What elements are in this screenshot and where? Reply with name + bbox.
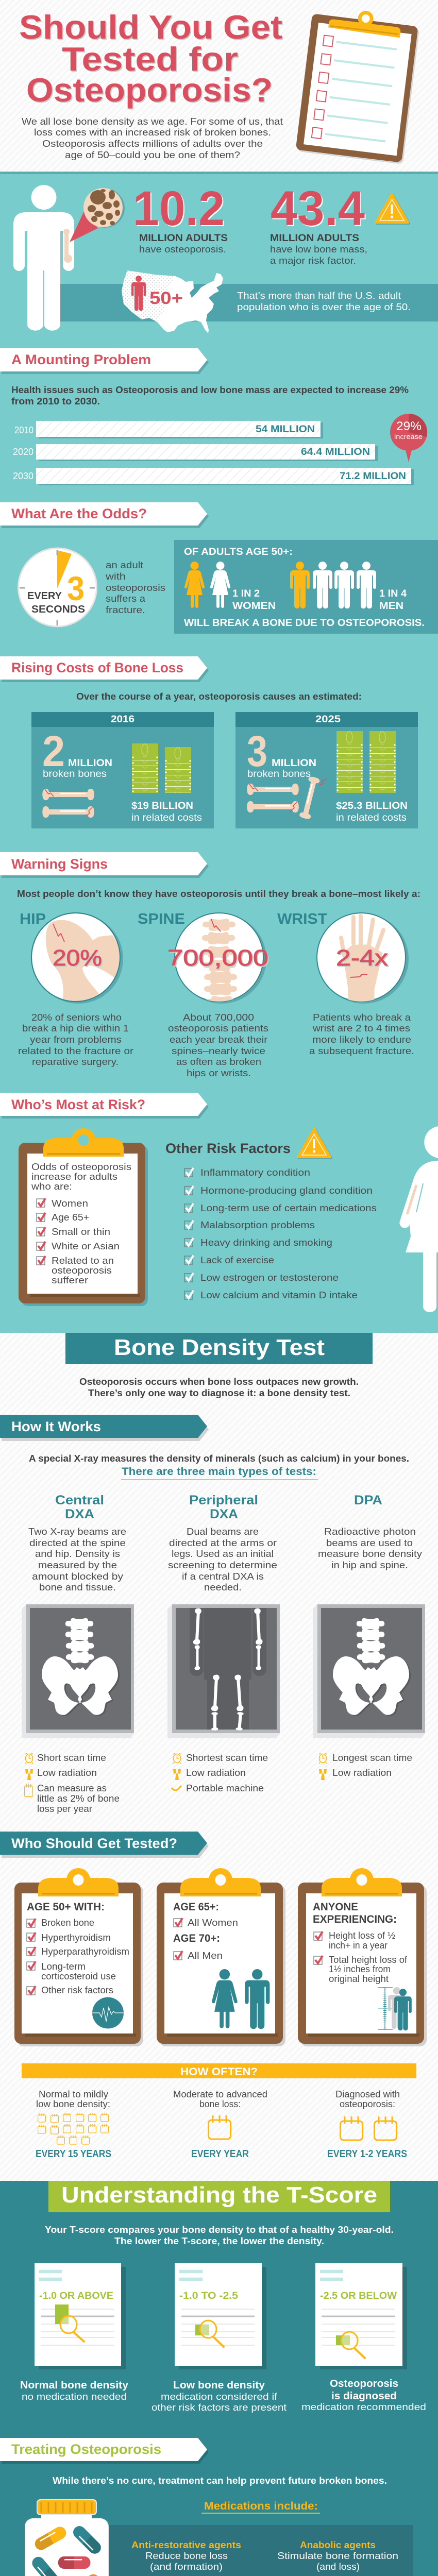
list: Peripheral DXA features: Low radiation [186,1768,246,1778]
stat: 43.4 million: a major risk factor. [270,256,356,266]
text: anabolic agents: Stimulate bone formation [277,2551,398,2561]
bar: 2020 [13,444,378,461]
text: mounting problem: Health issues such as Osteoporosis and low bone mass are expected to increase 29% [11,385,409,395]
bar chart: projected cases [13,421,414,485]
text: wrist stat: a subsequent fracture. [309,1046,414,1056]
stat: 10.2 million: 10.2 [133,181,225,236]
column: every 15 years: low bone density: [36,2099,110,2109]
column: every 1-2 years [327,2089,407,2160]
list: Central DXA features: Short scan time [37,1753,106,1763]
heading: Who's Most at Risk?: Who’s Most at Risk? [11,1097,145,1112]
panel: 2025 costs: 2025 [315,714,341,725]
text: anabolic agents [277,2540,398,2572]
panel: 2016 costs: 2 [42,727,65,775]
panel: 2025 costs: $25.3 BILLION [336,801,408,811]
panel: 2025 costs: in related costs [336,812,407,823]
panel: clipboard age 65+ and 70+: All Women [188,1918,238,1928]
text: normal density: Normal bone density [20,2380,129,2391]
banner: How Often?: HOW OFTEN? [180,2066,258,2078]
icon: x-ray of spine and hip [313,1604,425,1738]
panel: odds by gender: WOMEN [232,601,276,612]
checklist: risk groups: sufferer [52,1275,88,1285]
list: DPA features [319,1753,412,1780]
column: every 1-2 years: Diagnosed with [335,2089,400,2099]
column: Peripheral DXA: directed at the arms or [169,1538,277,1548]
checklist: risk factors: Hormone-producing gland condition [200,1185,373,1196]
text: normal density [20,2380,129,2402]
checklist: risk factors: Inflammatory condition [200,1167,310,1178]
panel: risk clipboard [19,1128,148,1306]
checklist: risk groups [37,1198,120,1285]
text: osteoporosis diagnosed: medication recommended [301,2402,426,2412]
panel: odds by gender: 1 IN 2 [232,588,260,599]
icon: clock every 3 seconds: EVERY [27,590,62,602]
stat: 43.4 million: 43.4 [271,181,365,236]
icon: pill bottle [25,2499,109,2576]
checklist: risk groups: Related to an [52,1256,114,1266]
panel: hip [18,911,133,1067]
panel: T-score -2.5 or below [301,2263,426,2412]
checklist: risk factors: Long-term use of certain medications [200,1203,377,1213]
panel: hip: 20% [53,945,102,971]
column: every year: EVERY YEAR [191,2148,249,2160]
panel: clipboard height loss [298,1868,427,2046]
heading: Understanding the T-Score: Understanding the T-Score [61,2182,377,2208]
panel: odds by gender: WILL BREAK A BONE DUE TO OSTEOPOROSIS. [184,618,425,629]
banner: How Often? [22,2063,416,2078]
heading: Who Should Get Tested?: Who Should Get Tested? [11,1836,177,1851]
text: bone density intro: Osteoporosis occurs when bone loss outpaces new growth. [79,1377,359,1387]
text: fracture statement: an adult [106,560,143,570]
heading: Treating Osteoporosis: Treating Osteoporosis [11,2442,161,2457]
band: over 50 population: That’s more than half the U.S. adult [237,291,401,301]
column: Peripheral DXA: Peripheral [189,1493,258,1507]
panel: risk clipboard: increase for adults [31,1172,117,1182]
panel: risk clipboard: Odds of osteoporosis [31,1162,131,1172]
list: DPA features: Low radiation [332,1768,392,1778]
checklist: risk groups: Women [52,1198,88,1209]
text: hip stat: related to the fracture or [18,1046,133,1056]
panel: clipboard age 50+: corticosteroid use [41,1971,116,1981]
heading: A Mounting Problem [0,348,209,374]
heading: Understanding the T-Score [48,2181,390,2212]
text: wrist stat: Patients who break a [313,1012,411,1023]
text: hip stat: 20% of seniors who [31,1012,122,1023]
icon: clipboard checklist [295,4,421,164]
panel: T-score -1.0 or above: -1.0 OR ABOVE [39,2291,113,2301]
text: anabolic agents: (and loss) [316,2562,360,2572]
text: T-score intro: Your T-score compares your bone density to that of a healthy 30-year-old. [45,2225,394,2235]
list: Peripheral DXA features: Portable machine [186,1783,264,1793]
text: spine stat: each year break their [170,1035,267,1045]
text: treatment intro: While there’s no cure, treatment can help prevent future broken bones. [53,2476,387,2486]
panel: clipboard age 65+ and 70+ [157,1868,285,2046]
panel: odds by gender: MEN [379,601,403,612]
text: anabolic agents: Anabolic agents [300,2540,376,2550]
text: osteoporosis diagnosed: is diagnosed [331,2391,397,2402]
panel: medications: Medications include: [204,2500,318,2512]
text: spine stat: spines–nearly twice [172,1046,265,1056]
text: low density: other risk factors are present [151,2402,287,2413]
column: Peripheral DXA: needed. [204,1582,242,1592]
title: Osteoporosis? [26,71,273,109]
text: bone density intro: There’s only one way to diagnose it: a bone density test. [88,1388,350,1398]
icon: x-ray of spine and hip [22,1604,134,1738]
panel: clipboard age 50+: Broken bone [41,1918,94,1928]
icon: men 1 in 4 [290,562,376,608]
panel: wrist: WRIST [277,911,327,927]
text: hip stat: break a hip die within 1 [22,1023,129,1033]
list: Peripheral DXA features: Shortest scan time [186,1753,268,1763]
heading: Rising Costs of Bone Loss: Rising Costs of Bone Loss [11,660,183,675]
list: Central DXA features: Low radiation [37,1768,97,1778]
stat: 10.2 million: MILLION ADULTS [139,233,228,244]
panel: odds by gender [174,540,438,634]
panel: T-score -1.0 or above [20,2263,129,2402]
icon: money stacks [132,743,191,793]
intro text [22,116,283,160]
column: Peripheral DXA: DXA [210,1507,238,1521]
heading: Bone Density Test [65,1333,373,1364]
heading: Rising Costs of Bone Loss [0,656,209,682]
column: DPA: measure bone density [318,1549,422,1559]
list: Peripheral DXA features [172,1753,268,1793]
title: Tested for [62,40,238,78]
text: low density: medication considered if [161,2392,278,2402]
icon: two calendars [340,2116,397,2140]
bar: 2020: 2020 [13,447,33,457]
icon: calendar [208,2115,231,2139]
bar: 2010: 2010 [14,425,33,435]
intro text: We all lose bone density as we age. For some of us, that [22,116,283,127]
checklist: risk factors: Malabsorption problems [200,1220,315,1230]
panel: 2025 costs: 3 [247,727,267,775]
column: Peripheral DXA: Dual beams are [187,1527,259,1537]
heading: What Are the Odds?: What Are the Odds? [11,506,147,521]
text: costs intro: Over the course of a year, osteoporosis causes an estimated: [76,691,362,702]
checklist: risk factors: Lack of exercise [200,1255,274,1265]
checklist: risk groups: osteoporosis [52,1265,112,1276]
text: hip stat: reparative surgery. [32,1057,119,1067]
panel: spine: SPINE [138,911,185,927]
panel: 2025 costs: broken bones [247,769,311,779]
list: Central DXA features: little as 2% of bone [37,1793,120,1804]
panel: 2016 costs: $19 BILLION [131,801,193,811]
intro text: age of 50–could you be one of them? [65,150,240,160]
icon: women 1 in 2 [184,562,230,608]
text: T-score intro: The lower the T-score, the lower the density. [114,2236,324,2246]
panel: clipboard age 50+ [14,1868,143,2046]
icon: heartbeat [92,1997,124,2029]
column: DPA [313,1493,425,1780]
panel: 2016 costs [31,712,214,828]
panel: T-score -1.0 to -2.5: -1.0 TO -2.5 [179,2291,238,2301]
icon: warning triangle [376,194,409,224]
column: Central DXA [22,1493,134,1814]
text: bone density intro [79,1377,359,1398]
column: every year: Moderate to advanced [173,2089,267,2099]
icon: clock every 3 seconds [19,548,97,626]
panel: risk clipboard: who are: [31,1181,72,1192]
icon: three broken bones [247,776,327,820]
panel: clipboard age 50+: Hyperparathyroidism [41,1946,129,1957]
column: every year: bone loss: [199,2099,241,2109]
heading: Who's Most at Risk? [0,1093,209,1118]
text: spine stat: as often as broken [176,1057,261,1067]
icon: warning triangle [298,1129,331,1158]
column: DPA: in hip and spine. [331,1560,408,1570]
text: low density [151,2380,287,2413]
checklist: risk groups: White or Asian [52,1241,120,1251]
checklist: risk groups: Age 65+ [52,1212,89,1223]
panel: hip: HIP [20,911,46,927]
bar: 2030: 71.2 MILLION [340,471,406,482]
text: T-score intro [45,2225,394,2246]
list: Central DXA features: Can measure as [37,1783,107,1793]
panel: 2025 costs [235,712,418,828]
heading: Treating Osteoporosis [0,2438,209,2464]
column: Central DXA: Two X-ray beams are [28,1527,126,1537]
text: spine stat: hips or wrists. [187,1068,251,1078]
panel: other risk factors: Other Risk Factors [165,1141,291,1156]
bar: 2030 [13,468,414,485]
callout: 29% increase pin: 29% [396,419,422,433]
icon: clock every 3 seconds: 3 [67,569,85,607]
panel: 2016 costs: broken bones [43,769,107,779]
title: Should You Get [19,8,282,46]
panel: clipboard height loss: 1½ inches from [329,1964,391,1974]
text: fracture statement: osteoporosis [106,583,165,593]
list: DPA features: Longest scan time [332,1753,412,1763]
panel: clipboard height loss: ANYONE [313,1901,358,1913]
icon: 15 calendars [38,2113,108,2144]
column: every 15 years: Normal to mildly [39,2089,108,2099]
heading: How It Works [0,1415,209,1441]
column: Central DXA: and hip. Density is [35,1549,120,1559]
heading: Who Should Get Tested? [0,1832,209,1858]
column: DPA: DPA [354,1493,382,1507]
title [19,8,282,109]
panel: clipboard age 50+: Long-term [41,1961,86,1972]
panel: clipboard height loss: inch+ in a year [329,1940,388,1951]
text: mounting problem: from 2010 to 2030. [11,396,100,406]
stat: 43.4 million: have low bone mass, [270,244,367,255]
heading: Warning Signs [0,852,209,878]
checklist: risk factors [184,1167,377,1300]
column: every 15 years: EVERY 15 YEARS [36,2148,111,2160]
panel: clipboard age 50+: Other risk factors [41,1985,113,1995]
text: wrist stat: more likely to endure [312,1035,411,1045]
panel: clipboard age 65+ and 70+: All Men [188,1951,223,1961]
icon: money stacks [336,731,396,793]
panel: clipboard height loss: Total height loss of [329,1955,408,1965]
text: hip stat: year from problems [30,1035,122,1045]
icon: x-ray of arms and legs [167,1604,280,1738]
column: Central DXA: Central [55,1493,104,1507]
text: anti-restorative agents: Reduce bone loss [145,2551,228,2561]
column: Peripheral DXA [167,1493,280,1793]
panel: other risk factors [165,1129,377,1300]
text: osteoporosis diagnosed: Osteoporosis [330,2378,398,2389]
panel: clipboard age 50+: AGE 50+ WITH: [27,1901,105,1913]
panel: spine: 700,000 [167,945,268,971]
text: spine stat [168,1012,268,1078]
panel: clipboard age 65+ and 70+: AGE 70+: [173,1933,220,1944]
panel: clipboard height loss: Height loss of ½ [329,1930,395,1941]
panel: T-score -1.0 to -2.5 [151,2263,287,2413]
column: every 1-2 years: osteoporosis: [340,2099,395,2109]
panel: 2016 costs: MILLION [68,758,112,769]
heading: What Are the Odds? [0,502,209,528]
column: Central DXA: DXA [65,1507,94,1521]
text: wrist stat [309,1012,414,1056]
icon: US map with 50+ [122,270,223,333]
column: Central DXA: amount blocked by [32,1571,123,1582]
bar: 2010 [14,421,323,438]
checklist: risk groups: Small or thin [52,1227,110,1237]
icon: clock every 3 seconds: SECONDS [31,604,85,615]
column: Peripheral DXA: screening to determine [168,1560,277,1570]
text: how it works [29,1453,409,1480]
heading: Warning Signs: Warning Signs [11,856,108,872]
panel: medications [109,2500,413,2576]
icon: US map with 50+: 50+ [149,289,183,308]
text: anti-restorative agents: Anti-restorative agents [131,2540,241,2550]
panel: 2016 costs: in related costs [131,812,202,823]
intro text: loss comes with an increased risk of broken bones. [34,127,271,138]
icon: height ruler with person [378,1987,412,2030]
text: fracture statement: fracture. [106,605,145,615]
column: every 1-2 years: EVERY 1-2 YEARS [327,2148,407,2160]
bar: 2020: 64.4 MILLION [301,447,370,457]
text: low density: Low bone density [173,2380,265,2391]
column: every year [173,2089,267,2160]
text: anti-restorative agents [131,2540,241,2572]
column: Central DXA: directed at the spine [29,1538,126,1548]
text: wrist stat: wrist are 2 to 4 times [312,1023,410,1033]
text: how it works: There are three main types of tests: [122,1466,316,1478]
text: spine stat: About 700,000 [183,1012,254,1023]
panel: 2016 costs: 2016 [111,714,134,725]
callout: 29% increase pin [390,414,427,462]
panel: clipboard height loss: EXPERIENCING: [313,1913,397,1925]
checklist: risk factors: Low calcium and vitamin D intake [200,1290,358,1300]
column: DPA: beams are used to [326,1538,413,1548]
panel: clipboard age 65+ and 70+: AGE 65+: [173,1901,219,1913]
text: anti-restorative agents: (and formation) [150,2562,223,2572]
panel: spine [138,911,268,1078]
panel: odds by gender: OF ADULTS AGE 50+: [184,547,293,557]
text: fracture statement: with [105,571,126,582]
panel: 2025 costs: MILLION [272,758,316,769]
text: mounting problem [11,385,409,406]
text: osteoporosis diagnosed [301,2378,426,2412]
panel: clipboard age 50+: Hyperthyroidism [41,1933,111,1943]
stat: 10.2 million: have osteoporosis. [139,244,226,255]
callout: 29% increase pin: increase [394,433,423,440]
text: hip stat [18,1012,133,1067]
column: Peripheral DXA: if a central DXA is [182,1571,264,1582]
list: Central DXA features: loss per year [37,1804,92,1814]
text: how it works: A special X-ray measures the density of minerals (such as calcium) in your bones. [29,1453,409,1464]
panel: T-score -2.5 or below: -2.5 OR BELOW [320,2291,397,2301]
panel: wrist: 2-4x [336,945,388,971]
figure: person with bone callout [13,185,125,331]
heading: Bone Density Test: Bone Density Test [114,1335,325,1360]
figure: woman at right edge [399,1126,438,1312]
text: fracture statement: suffers a [106,594,146,604]
icon: broken bones [42,789,94,818]
text: fracture statement [105,560,165,615]
stat: 43.4 million: MILLION ADULTS [270,233,359,244]
band: over 50 population: population who is over the age of 50. [237,302,411,312]
bar: 2010: 54 MILLION [256,424,315,435]
column: every 15 years [36,2089,111,2160]
column: DPA: Radioactive photon [324,1527,416,1537]
stat: 43.4 million [270,181,367,266]
column: Peripheral DXA: legs. Used as an initial [172,1549,274,1559]
bar: 2030: 2030 [13,471,33,481]
list: Central DXA features [25,1753,120,1814]
heading: How It Works: How It Works [11,1419,101,1434]
checklist: risk factors: Heavy drinking and smoking [200,1238,332,1248]
panel: wrist [277,911,414,1056]
column: Central DXA: measured by the [38,1560,117,1570]
intro text: Osteoporosis affects millions of adults over the [42,139,263,149]
band: over 50 population [60,284,438,321]
icon: woman and man [212,1969,269,2029]
text: warning intro: Most people don’t know they have osteoporosis until they break a bone–most likely a: [17,889,420,899]
checklist: risk factors: Low estrogen or testosterone [200,1273,339,1283]
column: Central DXA: bone and tissue. [39,1582,116,1592]
text: spine stat: osteoporosis patients [168,1023,268,1033]
heading: A Mounting Problem: A Mounting Problem [11,352,151,367]
text: normal density: no medication needed [22,2392,127,2402]
panel: odds by gender: 1 IN 4 [379,588,407,599]
panel: clipboard height loss: original height [329,1974,389,1984]
